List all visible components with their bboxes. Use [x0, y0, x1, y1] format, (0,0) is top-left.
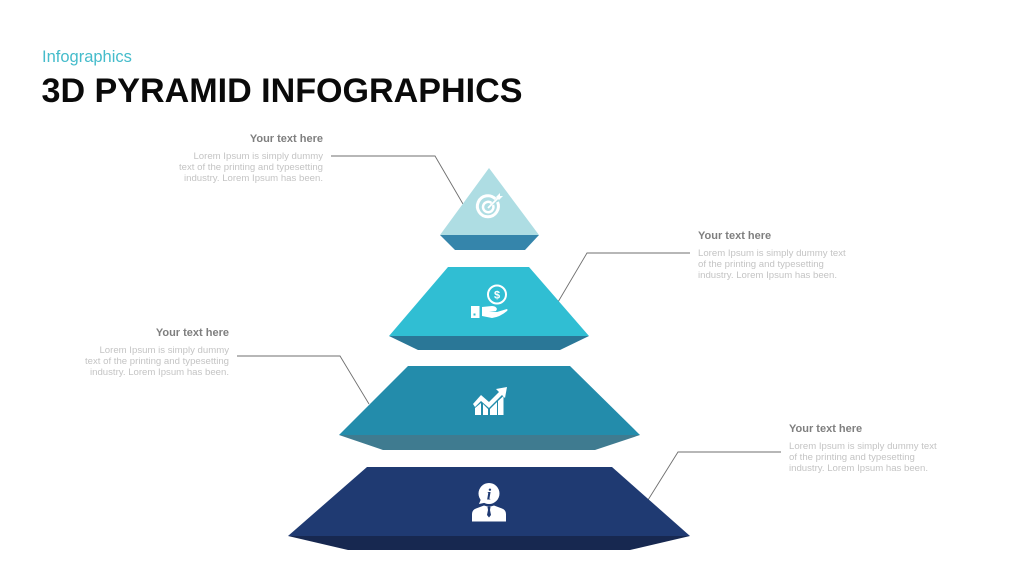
text block: second tier	[698, 230, 846, 281]
text block: second tier: of the printing and typesetting	[698, 259, 824, 270]
icon: person with info bubble	[472, 483, 506, 522]
text block: third tier: Your text here	[156, 327, 229, 339]
title: 3D PYRAMID INFOGRAPHICS	[42, 72, 522, 110]
text block: second tier: industry. Lorem Ipsum has been.	[698, 270, 837, 281]
text block: bottom tier: industry. Lorem Ipsum has been.	[789, 463, 928, 474]
leader line: bottom tier	[648, 452, 781, 500]
icon: target	[477, 193, 503, 217]
text block: second tier: Your text here	[698, 230, 771, 242]
text block: bottom tier: Lorem Ipsum is simply dummy text	[789, 440, 937, 452]
text block: top tier: industry. Lorem Ipsum has been.	[184, 173, 323, 184]
text block: third tier: text of the printing and typesetting	[85, 356, 229, 367]
icon: hand with coin	[471, 286, 508, 318]
subtitle: Infographics	[42, 48, 132, 66]
text block: bottom tier	[789, 423, 937, 474]
icon: growth chart	[473, 387, 507, 415]
text block: bottom tier: of the printing and typesetting	[789, 452, 915, 463]
text block: third tier: Lorem Ipsum is simply dummy	[99, 344, 229, 356]
pyramid tier 3	[339, 366, 640, 450]
leader line: top tier	[331, 156, 463, 204]
pyramid tier 4	[288, 467, 690, 550]
pyramid tier 2	[389, 267, 589, 350]
leader line: second tier	[558, 253, 690, 302]
text block: second tier: Lorem Ipsum is simply dummy text	[698, 248, 846, 258]
text block: third tier	[85, 327, 229, 378]
leader line: third tier	[237, 356, 369, 404]
text block: bottom tier: Your text here	[789, 423, 862, 435]
text block: third tier: industry. Lorem Ipsum has been.	[90, 367, 229, 378]
icon: hand with coin: $	[494, 290, 500, 302]
text block: top tier: Your text here	[250, 133, 323, 145]
text block: top tier: text of the printing and typesetting	[179, 162, 323, 173]
pyramid tier 1	[440, 168, 539, 250]
icon: person with info bubble: i	[487, 486, 492, 504]
text block: top tier	[179, 133, 323, 184]
text block: top tier: Lorem Ipsum is simply dummy	[193, 150, 323, 162]
